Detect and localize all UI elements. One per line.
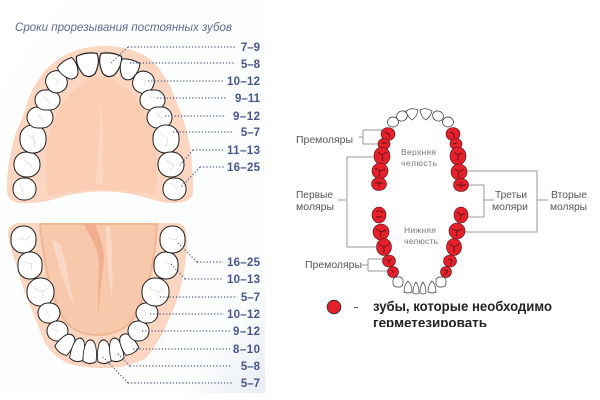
- panel: sealing diagram connectors: [338, 130, 548, 271]
- lower eruption ages: 10–12: [227, 309, 260, 321]
- red teeth: upper arch: [372, 128, 468, 192]
- legend swatch: [327, 300, 341, 314]
- label: second molars: моляры: [550, 201, 587, 213]
- lower right teeth: [97, 226, 185, 364]
- red teeth: lower arch: [372, 207, 468, 278]
- upper eruption ages: 5–8: [241, 59, 261, 71]
- palate: [46, 76, 157, 196]
- label: upper jaw: челюсть: [401, 158, 438, 168]
- label: second molars: [550, 189, 587, 213]
- white teeth: lower arch: [393, 277, 446, 294]
- palate midline: [95, 100, 103, 184]
- lower gum: [8, 223, 187, 368]
- legend dash: [354, 307, 358, 308]
- lower jaw illustration: [8, 223, 187, 368]
- label: lower premolars: Премоляры: [305, 259, 362, 271]
- legend text: зубы, которые необходимо: [373, 299, 552, 314]
- label: third molars: моляри: [492, 201, 528, 213]
- upper eruption ages: 11–13: [227, 145, 260, 157]
- tongue groove: [84, 224, 104, 315]
- label: third molars: Третьи: [495, 189, 527, 201]
- upper jaw illustration: [7, 46, 193, 203]
- label: third molars: [492, 189, 528, 213]
- tongue: [40, 224, 157, 335]
- upper eruption ages: 9–12: [233, 111, 260, 123]
- label: lower jaw: челюсть: [404, 236, 439, 246]
- legend text: герметезировать: [373, 316, 487, 330]
- title: Сроки прорезывания постоянных зубов: [15, 20, 232, 34]
- upper eruption ages: 9–11: [235, 93, 261, 105]
- lower eruption ages: 16–25: [227, 257, 261, 269]
- upper eruption ages: 16–25: [227, 162, 261, 174]
- panel: eruption timing background: [0, 0, 265, 393]
- legend: [326, 300, 552, 327]
- dotted leaders: lower: [103, 243, 237, 383]
- upper eruption ages: [227, 42, 261, 174]
- upper right teeth: [97, 52, 186, 200]
- label: first molars: Первые: [296, 189, 333, 201]
- tongue highlights: [52, 226, 112, 305]
- upper left teeth: [13, 52, 101, 200]
- lower eruption ages: 5–7: [241, 378, 260, 390]
- label: lower jaw: Нижняя: [404, 225, 436, 235]
- lower eruption ages: 5–8: [241, 361, 261, 373]
- label: upper jaw: [401, 147, 438, 168]
- upper eruption ages: 7–9: [241, 42, 260, 54]
- lower eruption ages: 9–12: [233, 326, 260, 338]
- lower eruption ages: 8–10: [233, 344, 260, 356]
- lower eruption ages: [227, 257, 261, 390]
- lower eruption ages: 5–7: [241, 292, 260, 304]
- label: second molars: Вторые: [551, 189, 587, 201]
- label: first molars: моляры: [296, 201, 334, 213]
- lower eruption ages: 10–13: [227, 274, 260, 286]
- label: upper premolars: Премоляры: [296, 134, 353, 146]
- white teeth: upper arch: [388, 109, 454, 127]
- upper eruption ages: 5–7: [241, 127, 260, 139]
- lower left teeth: [11, 226, 97, 364]
- label: lower jaw: [404, 225, 439, 246]
- upper gum: [7, 46, 193, 203]
- dotted leaders: upper: [111, 47, 235, 188]
- label: first molars: [296, 189, 334, 213]
- label: upper jaw: Верхняя: [401, 147, 436, 157]
- legend text: [373, 300, 552, 327]
- upper eruption ages: 10–12: [227, 76, 260, 88]
